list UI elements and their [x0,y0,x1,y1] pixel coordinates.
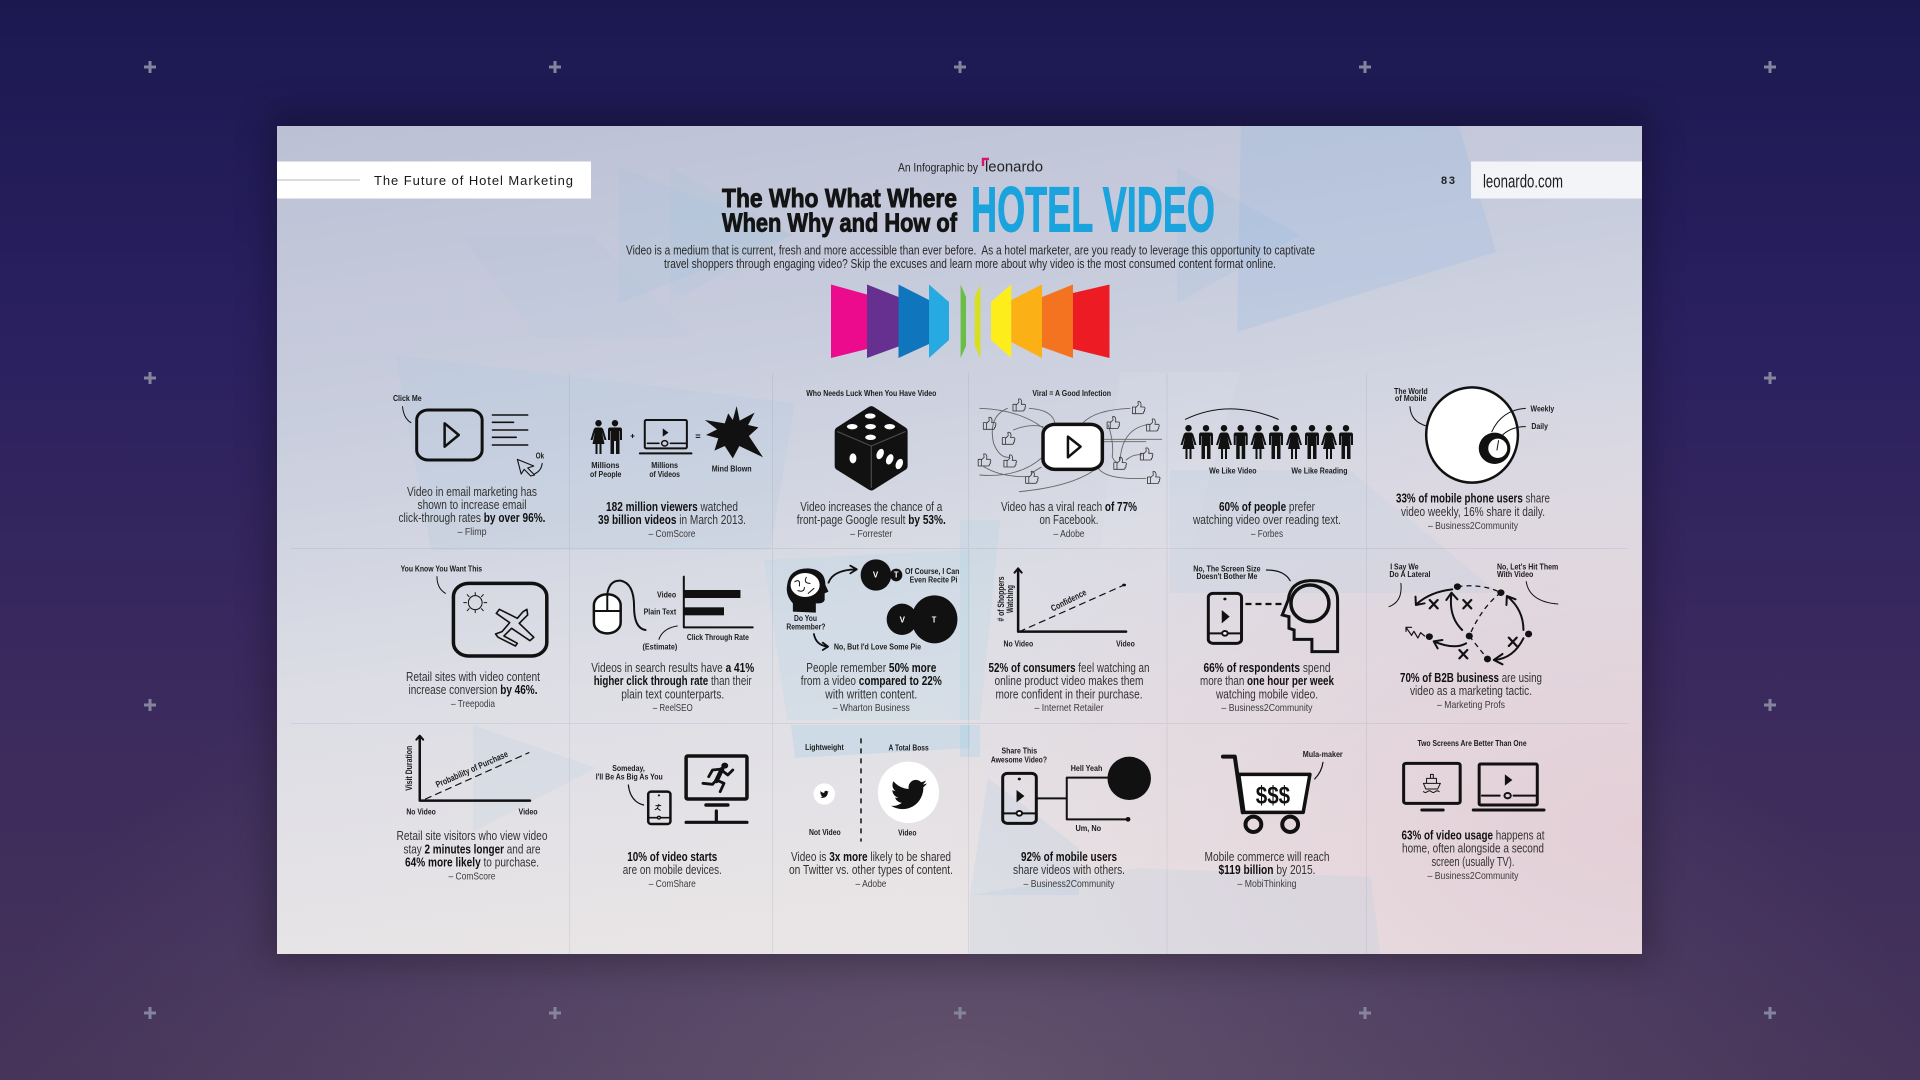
stat text: conversion: – Treepodia [451,698,495,710]
icon: people plus videos equals mind blown: of People [590,470,621,479]
icon: world of mobile circle chart: Daily [1531,422,1548,432]
stat text: mobile sharing [1396,492,1550,532]
stat text: click through: higher click through rate than their [594,674,752,688]
stat text: prefer: 60% of people prefer [1219,500,1315,514]
icon: phone decision diagram: Share This [1002,746,1037,756]
stat text: B2B: video as a marketing tactic. [1410,684,1532,698]
panel: twitter stat [789,738,953,890]
stat text: B2B: 70% of B2B business are using [1400,671,1542,685]
url bar: leonardo.com: leonardo.com [1483,172,1563,192]
icon: mouse and bar chart: Click Through Rate [687,633,749,642]
icon: dice: Who Needs Luck When You Have Video [806,389,937,398]
stat text: dice: – Forrester [850,528,893,540]
intro paragraph: travel shoppers through engaging video? Skip the excuses and learn more about why video is the most consumed content format online. [664,257,1276,271]
icon: people plus videos equals mind blown: of Videos [649,470,680,479]
stat text: two screens: 63% of video usage happens at [1402,828,1545,842]
stat text: confidence [988,661,1150,714]
chart: visit duration and purchase probability: Probability of Purchase [434,749,509,790]
icon: phone decision diagram: Awesome Video? [991,755,1047,765]
stat text: viral: Video has a viral reach of 77% [1001,500,1137,514]
icon: mouse and bar chart [594,577,753,651]
icon: people plus videos equals mind blown: Millions [591,461,620,470]
icon: shopping cart with dollars [1223,750,1343,832]
icon: video player with cursor: Click Me [393,394,422,403]
icon: head with brain and Venn circles [786,559,960,651]
stat text: dice: front-page Google result by 53%. [797,513,946,527]
stat text: confidence: 52% of consumers feel watching an [988,661,1150,675]
stat text: visit duration: Retail site visitors who view video [396,829,548,843]
panel: two screens stat [1402,739,1545,882]
icon: viral video network with thumbs: Viral = A Good Infection [1032,389,1111,399]
intro paragraph [626,243,1315,271]
icon: football play diagram: I Say We [1390,562,1419,572]
url bar: leonardo.com [1471,162,1642,198]
stat text: share [1013,850,1125,890]
stat text: email: Video in email marketing has [407,485,537,499]
stat text: email [398,485,546,538]
icon: football play diagram [1389,562,1558,664]
icon: world of mobile circle chart: of Mobile [1395,394,1427,404]
banner: The Future of Hotel Marketing [277,162,591,198]
panel: email video stat [393,394,546,538]
stat text: prefer: watching video over reading text. [1192,513,1341,527]
stat text: mobile commerce: $119 billion by 2015. [1218,863,1316,877]
stat text: mobile hour: – Business2Community [1222,702,1313,714]
stat text: viral: on Facebook. [1040,513,1098,527]
icon: viral video network with thumbs [978,389,1162,492]
icon: twitter birds comparison: Lightweight [805,743,844,752]
stat text: mobile commerce [1204,850,1330,890]
icon: world of mobile circle chart: Weekly [1531,404,1555,414]
stat text: click through: Videos in search results have a 41% [591,661,754,675]
stat text: two screens: – Business2Community [1428,870,1519,882]
stat text: two screens: screen (usually TV). [1432,855,1514,869]
stat text: viewers [598,500,746,540]
stat text: memory: from a video compared to 22% [801,674,942,688]
icon: head with brain and Venn circles: Of Course, I Can [905,567,960,576]
stat text: mobile starts: are on mobile devices. [623,863,722,877]
stat text: mobile hour: watching mobile video. [1215,688,1318,702]
icon: mouse and bar chart: (Estimate) [642,642,677,651]
stat text: email: click-through rates by over 96%. [398,511,546,525]
icon: phone connected to head: Doesn't Bother Me [1196,572,1257,582]
icon: head with brain and Venn circles: T [894,570,899,580]
stat text: mobile sharing: video weekly, 16% share it daily. [1401,505,1545,519]
stat text: mobile hour: 66% of respondents spend [1204,661,1331,675]
panel: dice stat [797,389,946,540]
icon: people plus videos equals mind blown: Mind Blown [712,464,752,474]
chart: shoppers confidence line: No Video [1003,639,1033,649]
icon: head with brain and Venn circles: Do You [794,614,817,623]
stat text: confidence: – Internet Retailer [1034,702,1104,714]
panel: mobile starts stat [596,756,747,890]
panel: people prefer video stat [1180,409,1353,540]
byline: An Infographic by leonardo [898,158,1043,176]
stat text: share: 92% of mobile users [1021,850,1117,864]
icon: football play diagram: No, Let's Hit Them [1497,562,1558,572]
stat text: click through: plain text counterparts. [621,688,724,702]
icon: phone decision diagram [991,746,1151,834]
stat text: twitter [789,850,953,890]
panel: infographic sheet [277,126,1642,954]
stat text: memory [801,661,942,714]
title: HOTEL VIDEO: HOTEL VIDEO [971,174,1215,246]
chart: shoppers confidence line: Video [1116,639,1135,649]
chart: shoppers confidence line: Confidence [1049,587,1088,613]
stat text: viewers: – ComScore [648,528,696,540]
chart: visit duration and purchase probability: Visit Duration [404,746,414,791]
stat text: twitter: – Adobe [856,878,887,890]
stat text: prefer [1192,500,1341,540]
panel: memory stat [786,559,960,714]
stat text: email: shown to increase email [418,498,526,512]
icon: TV and laptop: Two Screens Are Better Than One [1417,739,1527,749]
panel: click through stat [591,577,754,714]
stat text: mobile starts: – ComShare [649,878,696,890]
stat text: email: – Flimp [458,526,487,538]
stat text: confidence: more confident in their purchase. [996,688,1142,702]
byline: An Infographic by leonardo: An Infographic by [898,160,978,174]
icon: shopping cart with dollars: Mula-maker [1303,750,1343,760]
stat text: viewers: 39 billion videos in March 2013. [598,513,746,527]
icon: head with brain and Venn circles: No, But I'd Love Some Pie [834,642,921,651]
stat text: click through [591,661,754,714]
stat text: visit duration: stay 2 minutes longer and are [404,842,541,856]
icon: world of mobile circle chart [1394,387,1555,483]
stat text: conversion: increase conversion by 46%. [408,683,538,697]
page number: 83 [1441,175,1455,187]
icon: head with brain and Venn circles: Remember? [786,622,826,631]
icon: small phone and big monitor with runner: I'll Be As Big As You [596,772,663,782]
icon: football play diagram: Do A Lateral [1389,570,1431,580]
icon: phone decision diagram: Hell Yeah [1071,764,1102,774]
stat text: mobile hour: more than one hour per week [1200,674,1334,688]
icon: mouse and bar chart: Video [657,590,676,600]
stat text: mobile commerce: Mobile commerce will reach [1204,850,1330,864]
icon: video player with cursor: Ok [536,451,545,460]
stat text: dice [797,500,946,540]
panel: retail conversion stat [401,564,547,710]
stat text: mobile starts: 10% of video starts [627,850,717,864]
icon: screen with plane and sun: You Know You Want This [401,564,482,574]
stat text: B2B: – Marketing Profs [1437,699,1505,711]
icon: people plus videos equals mind blown: Millions [651,461,678,470]
stat text: mobile commerce: – MobiThinking [1238,878,1297,890]
stat text: twitter: Video is 3x more likely to be shared [791,850,951,864]
stat text: memory: People remember 50% more [806,661,936,675]
panel: mobile commerce stat [1204,750,1343,890]
stat text: conversion [406,670,540,710]
icon: football play diagram: With Video [1497,570,1533,580]
icon: shopping cart with dollars: $$$ [1256,781,1291,809]
stat text: viral [1001,500,1137,540]
chart: shoppers confidence line [996,568,1135,649]
icon: people plus videos equals mind blown [590,406,763,479]
stat text: share: share videos with others. [1013,863,1125,877]
stat text: visit duration [396,829,548,882]
banner: The Future of Hotel Marketing: The Future of Hotel Marketing [374,173,573,188]
icon: phone connected to head [1193,564,1338,652]
stat text: share: – Business2Community [1024,878,1115,890]
stat text: mobile sharing: 33% of mobile phone users share [1396,492,1550,506]
chart: visit duration and purchase probability: No Video [406,807,436,816]
icon: row of people: We Like Video [1209,466,1257,476]
icon: video player with cursor [393,394,545,476]
icon: small phone and big monitor with runner [596,756,747,824]
panel: visit duration stat [396,736,548,882]
icon: twitter birds comparison: A Total Boss [889,743,929,752]
panel: mobile hour stat [1193,564,1338,714]
icon: mouse and bar chart: Plain Text [644,607,676,616]
title: The Who What Where When Why and How of: The Who What Where [722,183,957,213]
intro paragraph: Video is a medium that is current, fresh and more accessible than ever before. As a hotel marketer, are you ready to leverage this opportunity to captivate [626,243,1315,257]
stat text: prefer: – Forbes [1251,528,1283,540]
icon: screen with plane and sun [401,564,547,656]
icon: head with brain and Venn circles: V [873,570,879,580]
stat text: mobile hour [1200,661,1334,714]
icon: small phone and big monitor with runner: Someday, [612,764,645,773]
chart: visit duration and purchase probability: Video [518,807,538,816]
icon: twitter birds comparison: Video [898,828,917,837]
icon: twitter birds comparison: Not Video [809,828,841,837]
byline: An Infographic by leonardo: leonardo [985,158,1043,176]
stat text: visit duration: 64% more likely to purchase. [405,856,539,870]
stat text: mobile sharing: – Business2Community [1428,520,1519,532]
stat text: conversion: Retail sites with video content [406,670,540,684]
chart: shoppers confidence line: Watching [1005,585,1015,613]
stat text: two screens: home, often alongside a second [1402,842,1544,856]
panel: viral stat [978,389,1162,540]
icon: row of people [1180,409,1353,476]
stat text: memory: – Wharton Business [833,702,910,714]
icon: phone connected to head: No, The Screen Size [1193,564,1261,574]
icon: world of mobile circle chart: The World [1394,387,1428,397]
stat text: viewers: 182 million viewers watched [606,500,738,514]
stat text: dice: Video increases the chance of a [800,500,942,514]
stat text: twitter: on Twitter vs. other types of content. [789,863,953,877]
stat text: mobile starts [623,850,722,890]
chart: visit duration and purchase probability [404,736,538,816]
icon: head with brain and Venn circles: V [900,615,906,624]
icon: TV and laptop [1404,739,1544,810]
chart: shoppers confidence line: # of Shoppers [996,576,1006,622]
stat text: confidence: online product video makes them [994,674,1144,688]
icon: head with brain and Venn circles: Even Recite Pi [910,575,957,585]
panel: viewers stat [590,406,763,540]
title: The Who What Where When Why and How of [722,183,957,238]
stat text: viral: – Adobe [1054,528,1085,540]
icon: twitter birds comparison [805,738,939,842]
stat text: visit duration: – ComScore [448,870,496,882]
stat text: memory: with written content. [824,688,917,702]
icon: head with brain and Venn circles: T [932,615,937,624]
panel: mobile sharing stat [1394,387,1555,532]
panel: share stat [991,746,1151,890]
title: The Who What Where When Why and How of: When Why and How of [722,208,957,238]
stat text: B2B [1400,671,1542,711]
icon: phone decision diagram: Um, No [1075,824,1101,834]
panel: confidence stat [988,568,1150,714]
stat text: click through: – ReelSEO [653,702,693,714]
panel: B2B stat [1389,562,1558,711]
icon: rainbow video fan [831,284,1110,358]
icon: row of people: We Like Reading [1291,466,1348,476]
stat text: two screens [1402,828,1545,882]
icon: dice [806,389,937,487]
